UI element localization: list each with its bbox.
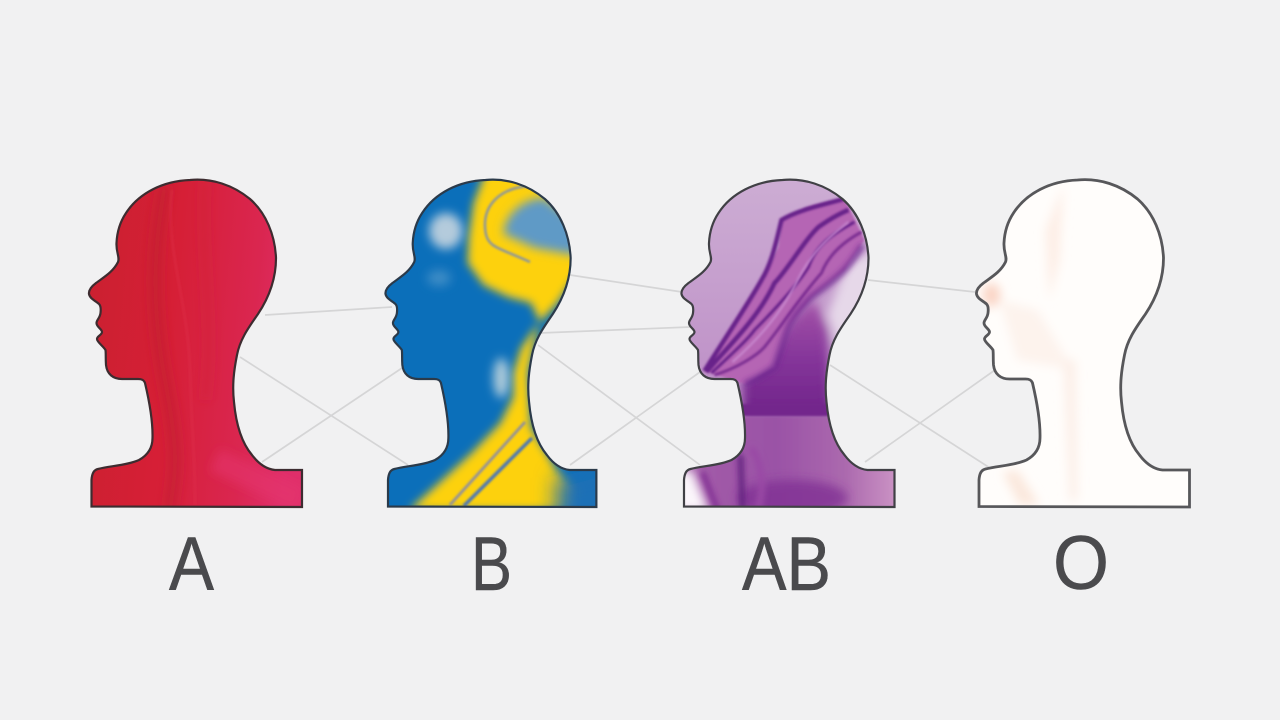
label O: O: [1053, 521, 1109, 606]
head O: near-white silhouette: [975, 178, 1191, 508]
head A: red silhouette: [88, 178, 304, 508]
connecting lines between heads: [240, 275, 995, 468]
label AB: AB: [742, 522, 831, 607]
label A: A: [169, 522, 214, 607]
head AB: purple silhouette: [680, 178, 896, 508]
label B: B: [471, 522, 512, 607]
infographic canvas: [88, 178, 1191, 590]
head B: blue and yellow silhouette: [384, 178, 598, 508]
